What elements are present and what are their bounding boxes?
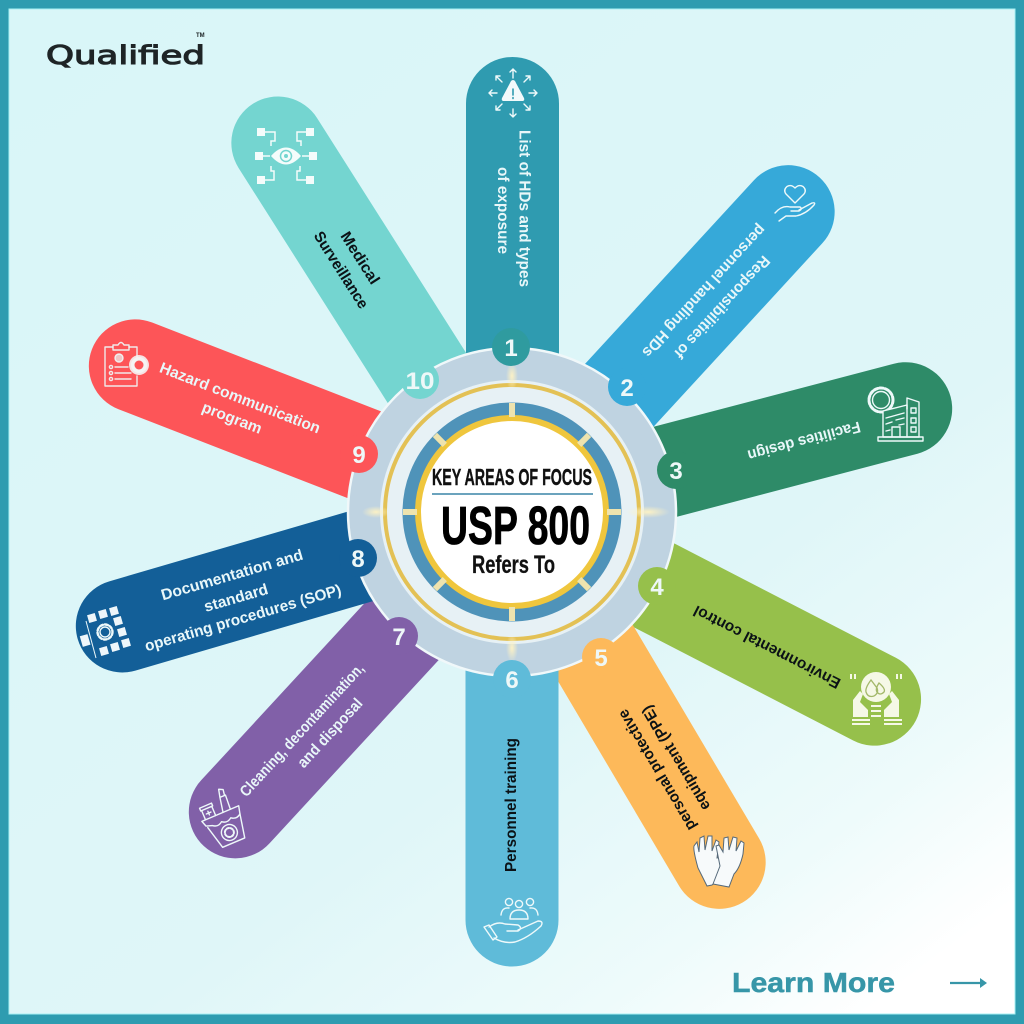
number badge 7: 7 [392, 624, 406, 651]
number badge 10 [401, 361, 439, 399]
hub divider [432, 493, 593, 495]
petal 4: environmental control [580, 517, 937, 762]
text: Hazard communication program: Hazard communication [157, 360, 323, 437]
number badge 6: 6 [505, 667, 519, 694]
number badge 4: 4 [650, 574, 664, 601]
text: Personnel training: Personnel training [503, 738, 520, 872]
call to action: Learn More: Learn More [732, 967, 895, 998]
number badge 5: 5 [594, 645, 608, 672]
petal 6: personnel training [466, 612, 558, 966]
number badge 1: 1 [504, 335, 518, 362]
petal 10: medical surveillance [214, 79, 498, 452]
icon: warning with radiating arrows [489, 69, 537, 117]
text: Documentation and standard operating procedures (SOP): operating procedures (SOP) [143, 582, 343, 655]
icon: clipboard and gear [105, 342, 147, 386]
number badge 8 [339, 539, 377, 577]
icon: gloves [694, 836, 744, 887]
text: Hazard communication program: program [199, 399, 264, 438]
arrow [950, 978, 987, 988]
text: List of HDs and types of exposure: List of HDs and types [516, 130, 532, 287]
petal 3: facilities design [597, 352, 962, 532]
icon: hands and droplets [851, 672, 902, 724]
petal 8: documentation [65, 495, 429, 684]
icon: people on hand [484, 898, 542, 942]
light sparkles on ring [362, 362, 670, 662]
center hub [348, 348, 676, 676]
number badge 4 [638, 567, 676, 605]
petal 7: cleaning [170, 554, 478, 878]
text: Medical Surveillance: Surveillance [310, 229, 372, 312]
number badge 5 [582, 638, 620, 676]
logo: Qualified: Qualified [46, 41, 205, 71]
icon: gear with squares [80, 606, 131, 658]
number badge 2: 2 [620, 375, 634, 402]
number badge 9 [340, 435, 378, 473]
text: Responsibilities of personnel handling HDs: Responsibilities of [670, 252, 773, 362]
number badge 3 [657, 451, 695, 489]
text: Documentation and standard operating procedures (SOP) [143, 547, 343, 655]
text: Documentation and standard operating procedures (SOP): Documentation and [159, 547, 305, 604]
icon: heart on hand [775, 186, 815, 221]
petal 2: responsibilities [545, 146, 854, 470]
text: List of HDs and types of exposure [494, 130, 532, 287]
number badge 9: 9 [352, 442, 366, 469]
text: Cleaning, decontamination, and disposal: and disposal [294, 695, 366, 771]
number badge 7 [380, 617, 418, 655]
icon: gear and buildings [869, 388, 923, 441]
hub text: Refers To: Refers To [472, 551, 555, 579]
icon: cleaning bucket [193, 785, 251, 851]
petal 9: hazard communication [75, 306, 436, 519]
petal 1: list of HDs [466, 57, 559, 412]
text: personal protective equipment (PPE): personal protective [615, 706, 700, 833]
number badge 2 [608, 368, 646, 406]
text: personal protective equipment (PPE): equipment (PPE) [639, 702, 714, 813]
text: Environmental control: Environmental control [691, 602, 844, 691]
hub text: KEY AREAS OF FOCUS: KEY AREAS OF FOCUS [432, 464, 592, 490]
petal 5: personal protective equipment [523, 574, 783, 926]
logo: Qualified [46, 33, 205, 71]
text: Cleaning, decontamination, and disposal: Cleaning, decontamination, [237, 660, 368, 800]
hub text: USP 800: USP 800 [441, 496, 590, 556]
text: Facilities design: Facilities design [746, 418, 862, 463]
number badge 1 [492, 328, 530, 366]
logo: Qualified: TM [196, 33, 205, 39]
text: Documentation and standard operating procedures (SOP): standard [202, 581, 270, 616]
number badge 6 [493, 660, 531, 698]
number badge 10: 10 [406, 368, 434, 395]
icon: eye with network [255, 128, 317, 184]
number badge 8: 8 [351, 546, 365, 573]
text: List of HDs and types of exposure: of exposure [494, 167, 511, 254]
text: Medical Surveillance: Medical [337, 229, 383, 288]
text: Responsibilities of personnel handling HDs: personnel handling HDs [638, 221, 769, 360]
number badge 3: 3 [669, 458, 683, 485]
